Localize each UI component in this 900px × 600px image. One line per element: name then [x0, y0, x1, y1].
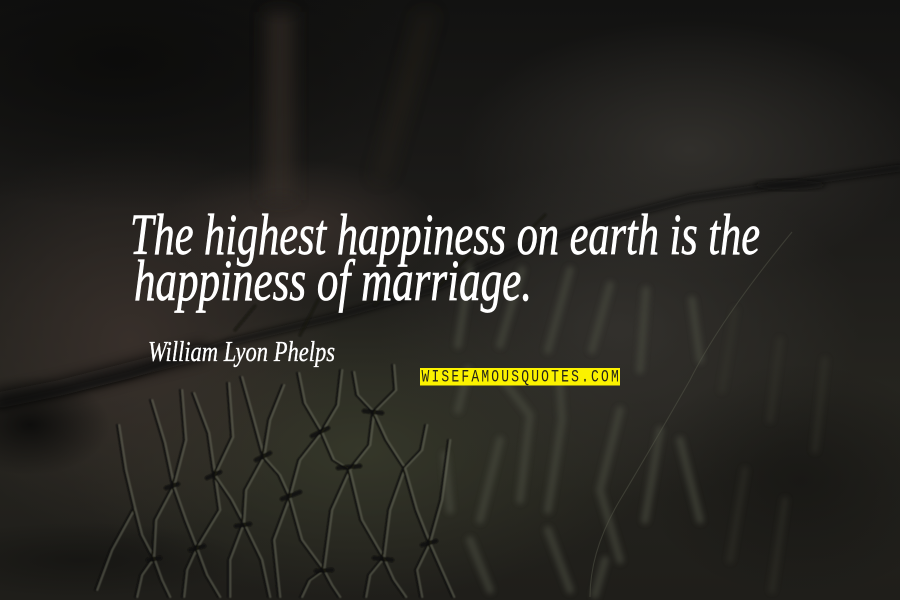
watermark badge: WISEFAMOUSQUOTES.COM	[422, 367, 619, 387]
soft blurred fence on the right	[445, 268, 700, 595]
far right faint fence	[722, 310, 825, 590]
wire twists	[148, 411, 436, 571]
quote line 2: happiness of marriage.	[134, 248, 532, 313]
dark wire strands	[95, 365, 452, 597]
chain-link fence	[95, 365, 454, 597]
quote text	[130, 202, 760, 313]
barbed wire	[0, 168, 900, 475]
thin grass stem	[590, 232, 792, 597]
author name: William Lyon Phelps	[148, 336, 335, 368]
light wire highlights	[97, 365, 454, 597]
